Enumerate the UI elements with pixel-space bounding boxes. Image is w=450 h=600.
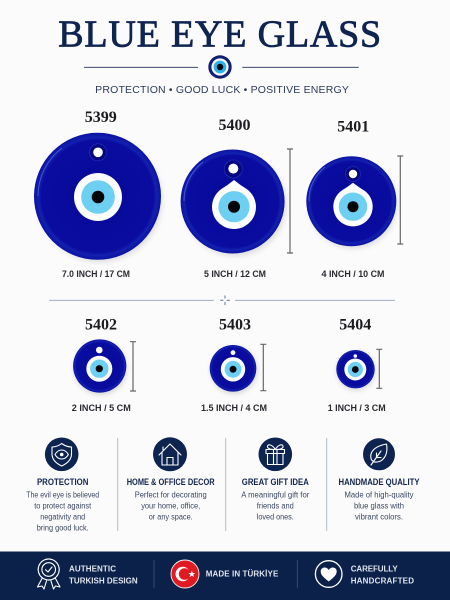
- bottom banner: [0, 552, 450, 600]
- icon: turkish flag: [171, 560, 199, 588]
- product 5401: 4 INCH / 10 CM: [322, 269, 384, 279]
- feature: home and office decor: or any space.: [149, 513, 193, 522]
- product 5401: 5401: [337, 119, 369, 136]
- column divider: [117, 438, 119, 531]
- section divider: [49, 296, 395, 305]
- product 5402: [72, 316, 136, 413]
- feature: great gift idea: loved ones.: [257, 513, 294, 522]
- carefully handcrafted: CAREFULLY: [351, 565, 398, 574]
- size bracket 5404: [376, 349, 382, 388]
- product 5404: [328, 316, 386, 413]
- feature: home and office decor: HOME & OFFICE DECOR: [127, 477, 215, 487]
- feature: protection: negativity and: [40, 513, 85, 522]
- icon: award rosette: [38, 559, 60, 589]
- size bracket 5402: [130, 342, 136, 391]
- feature: protection: [26, 438, 99, 533]
- product 5399: 7.0 INCH / 17 CM: [62, 269, 130, 279]
- icon: heart: [315, 561, 342, 587]
- product 5403: [201, 316, 267, 413]
- feature: great gift idea: GREAT GIFT IDEA: [242, 477, 309, 487]
- icon: shield with eye: [45, 438, 78, 471]
- feature: protection: PROTECTION: [37, 477, 88, 487]
- authentic turkish design: AUTHENTIC: [69, 565, 116, 574]
- authentic turkish design: TURKISH DESIGN: [69, 576, 138, 585]
- feature: great gift idea: [241, 438, 310, 522]
- product 5402: 2 INCH / 5 CM: [72, 403, 131, 413]
- feature: home and office decor: [127, 437, 215, 522]
- product 5400: 5400: [218, 117, 250, 134]
- icon: house: [153, 437, 187, 471]
- authentic turkish design: [69, 565, 138, 585]
- feature: handmade quality: [338, 438, 420, 522]
- product 5403: 1.5 INCH / 4 CM: [201, 403, 267, 413]
- feature: home and office decor: Perfect for decorating: [135, 491, 207, 500]
- feature: handmade quality: HANDMADE QUALITY: [338, 477, 420, 487]
- product 5399: [34, 109, 162, 279]
- made in turkiye: MADE IN TÜRKİYE: [206, 570, 279, 579]
- column divider: [326, 438, 328, 531]
- feature: handmade quality: Made of high-quality: [344, 491, 414, 500]
- feature: home and office decor: your home, office,: [141, 502, 200, 511]
- product 5402: 5402: [85, 316, 117, 333]
- carefully handcrafted: HANDCRAFTED: [351, 576, 414, 585]
- title: BLUE EYE GLASS: [58, 14, 381, 56]
- product 5399: 5399: [85, 109, 117, 126]
- product 5400: 5 INCH / 12 CM: [204, 269, 266, 279]
- header divider with eye icon: [84, 55, 359, 79]
- feature: handmade quality: vibrant colors.: [355, 513, 403, 522]
- subtitle: PROTECTION • GOOD LUCK • POSITIVE ENERGY: [95, 84, 349, 96]
- product 5404: 5404: [339, 316, 371, 333]
- feature: handmade quality: blue glass with: [354, 502, 404, 511]
- product 5404: 1 INCH / 3 CM: [328, 403, 386, 413]
- feature: great gift idea: A meaningful gift for: [241, 491, 310, 500]
- feature: protection: bring good luck.: [37, 524, 89, 533]
- size bracket 5401: [397, 156, 403, 244]
- size bracket 5403: [260, 344, 266, 391]
- carefully handcrafted: [351, 565, 414, 585]
- icon: leaf: [363, 438, 395, 470]
- product 5400: [181, 117, 293, 279]
- feature: protection: The evil eye is believed: [26, 491, 99, 500]
- product 5401: [306, 119, 403, 279]
- product 5403: 5403: [219, 316, 251, 333]
- size bracket 5400: [287, 149, 293, 253]
- feature: protection: to protect against: [34, 502, 92, 511]
- feature: great gift idea: friends and: [257, 502, 294, 511]
- column divider: [225, 438, 227, 531]
- icon: gift box: [258, 438, 292, 471]
